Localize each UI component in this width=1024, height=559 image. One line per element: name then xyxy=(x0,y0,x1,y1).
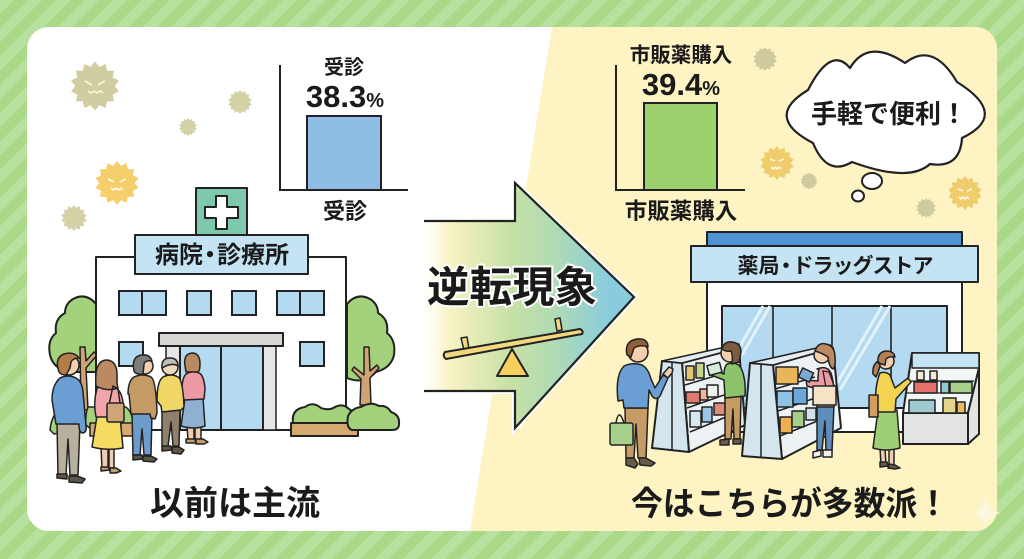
shopper: man in green xyxy=(707,342,745,445)
axis label: 市販薬購入: 市販薬購入 xyxy=(625,199,737,224)
caption: 以前は主流: 以前は主流 xyxy=(150,485,320,523)
value: 38.3%: 38.3% xyxy=(306,79,384,114)
planter and bushes xyxy=(50,404,399,436)
arrow shape xyxy=(424,183,634,428)
tree right xyxy=(347,296,394,405)
chart label: 受診 top: 受診 xyxy=(324,56,364,79)
big arrow xyxy=(424,183,634,428)
store glass windows xyxy=(722,306,947,408)
icon: seesaw xyxy=(444,318,583,376)
store signboard: 薬局・ドラッグストア xyxy=(738,254,933,278)
entrance xyxy=(159,333,283,430)
axes xyxy=(616,65,745,190)
shopper: man with bag xyxy=(610,339,673,468)
person 1 xyxy=(52,353,86,483)
thought bubble: 手軽で便利！: 手軽で便利！ xyxy=(811,99,967,129)
bar: 受診 xyxy=(307,116,381,190)
display case xyxy=(903,353,979,444)
tree left xyxy=(49,296,97,410)
person 3 xyxy=(128,355,157,462)
bar chart: 市販薬購入 xyxy=(616,44,745,224)
caption: 今はこちらが多数派！: 今はこちらが多数派！ xyxy=(631,485,949,522)
bar chart: 受診 xyxy=(280,56,408,224)
axes xyxy=(280,65,408,190)
icon: germs left xyxy=(61,62,252,231)
cross sign xyxy=(196,188,247,235)
icon: sparkle xyxy=(970,497,1000,529)
value: 39.4%: 39.4% xyxy=(642,67,720,102)
hospital signboard: 病院・診療所 xyxy=(155,242,289,269)
person 2 xyxy=(92,360,124,473)
shopper: woman with tote xyxy=(798,344,836,458)
illustration: hospital xyxy=(49,188,399,483)
heading: 逆転現象: 逆転現象 xyxy=(427,265,597,312)
shelf 1 xyxy=(652,344,745,452)
thought bubble: 手軽で便利！ xyxy=(787,52,985,201)
shopper: woman in yellow xyxy=(869,351,911,469)
icon: germs right xyxy=(753,47,982,218)
illustration: drugstore xyxy=(610,232,979,469)
building xyxy=(96,257,346,430)
chart label: 市販薬購入 top: 市販薬購入 xyxy=(630,44,732,67)
windows xyxy=(119,291,324,366)
shelf 2 xyxy=(742,345,841,459)
bar: 市販薬購入 xyxy=(644,103,717,190)
hospital signboard xyxy=(135,235,308,274)
person 5 xyxy=(181,353,208,444)
person 4 xyxy=(157,358,184,454)
store building xyxy=(707,232,962,432)
axis label: 受診: 受診 xyxy=(323,199,367,224)
store signboard xyxy=(691,246,978,282)
queue of people xyxy=(52,353,208,483)
